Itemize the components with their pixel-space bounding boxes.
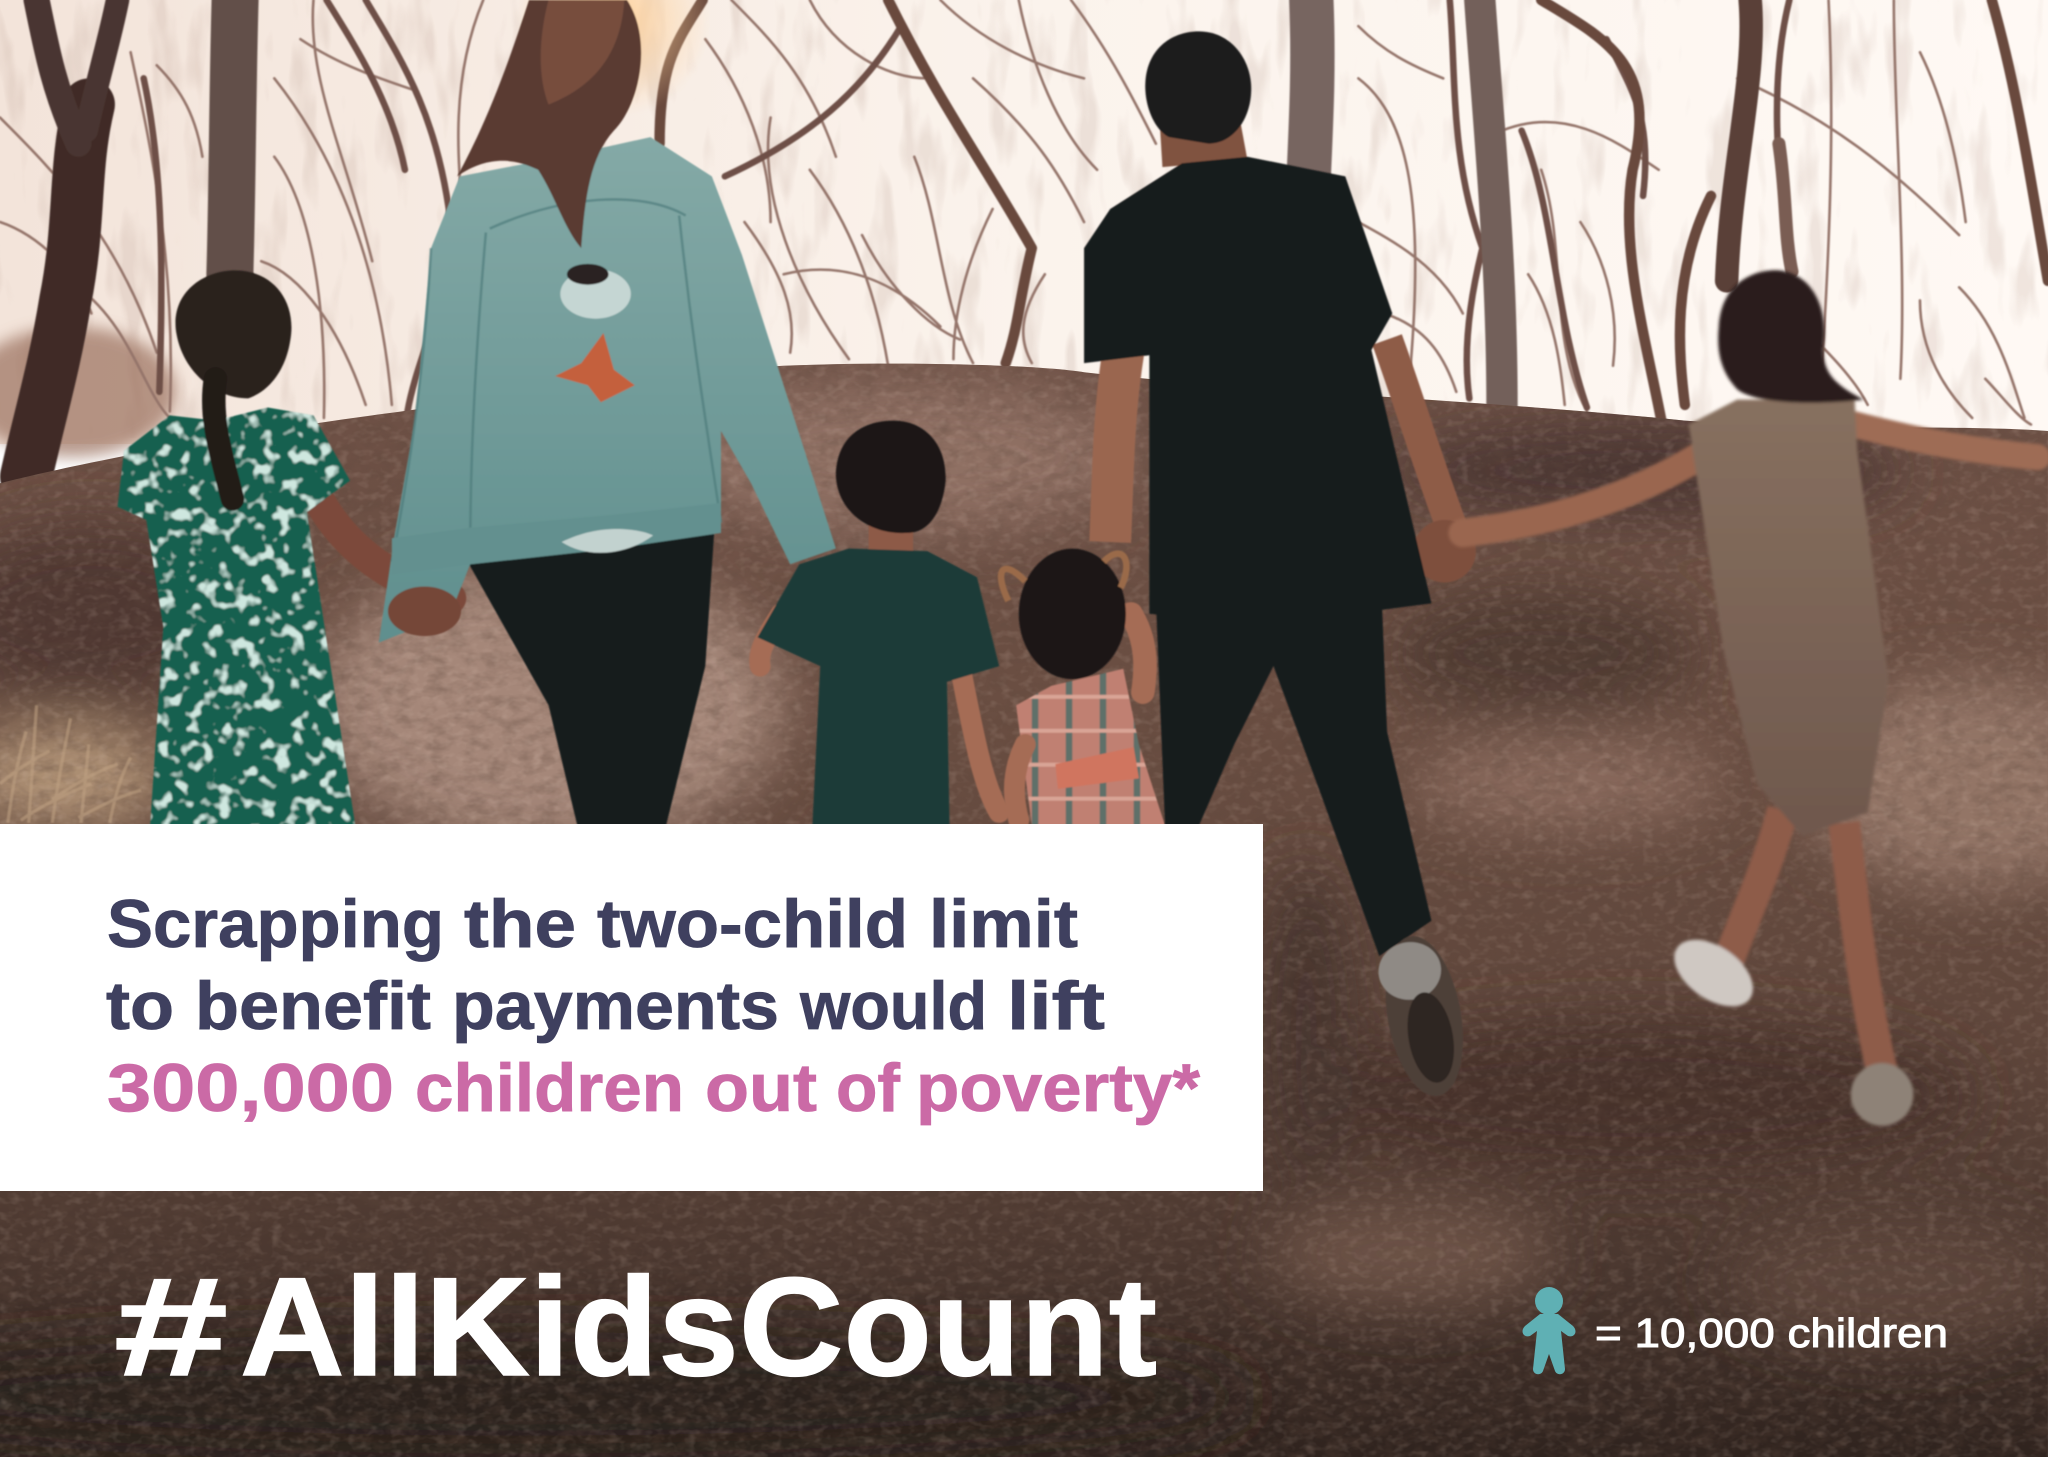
neck [869, 516, 913, 552]
hem tear [562, 529, 653, 553]
headline line 3 highlight: poverty* [916, 1050, 1201, 1126]
icon: child figure [1523, 1287, 1575, 1374]
pigtails [1001, 554, 1126, 601]
legend label: = 10,000 children [1595, 1310, 1948, 1356]
dress [1016, 669, 1165, 825]
panel background [0, 824, 1263, 1191]
head [836, 421, 946, 533]
legs [1156, 601, 1431, 956]
jacket [379, 137, 836, 643]
hashtag: AllKidsCount [240, 1248, 1157, 1405]
sash [1055, 747, 1139, 789]
hair highlight [541, 0, 624, 104]
hem band [392, 503, 721, 575]
person: boy in dark shirt [758, 421, 999, 825]
headline line 1: the [464, 886, 576, 962]
fine twig texture [0, 0, 2048, 438]
sky [0, 0, 2048, 444]
headline line 3 highlight: 300,000 [107, 1050, 394, 1126]
dress [1689, 400, 1889, 836]
right arm [1855, 424, 2038, 457]
dry grass [0, 705, 141, 823]
headline line 2: to [106, 968, 174, 1044]
person: father in black t-shirt [1084, 31, 1476, 1102]
arms [760, 614, 999, 812]
raised arm [1131, 614, 1145, 692]
headline line 3 highlight: out [705, 1050, 817, 1126]
arm [313, 490, 451, 598]
headline line 2: payments [452, 968, 779, 1044]
shoes [1662, 926, 1765, 1020]
leaf litter texture [0, 353, 2048, 1457]
headline line 2: would [799, 968, 987, 1044]
headline [106, 886, 1201, 1126]
hair [175, 270, 291, 398]
legs [1724, 810, 1885, 1081]
left arm [1463, 457, 1698, 533]
jeans [468, 529, 714, 825]
headline line 1: two-child [597, 886, 908, 962]
person: mother in denim jacket [379, 0, 836, 825]
hashtag: # [114, 1248, 228, 1405]
shoe [1373, 930, 1474, 1102]
headline line 2: lift [1007, 968, 1105, 1044]
jacket seams [392, 199, 721, 562]
ground texture [0, 353, 2048, 1457]
headline line 3 highlight: children [415, 1050, 684, 1126]
hair [1718, 270, 1864, 403]
bare trees and branches [0, 0, 2048, 477]
headline line 3 highlight: of [836, 1050, 900, 1126]
neck [1160, 124, 1247, 167]
glow around head [516, 0, 712, 118]
hand in hand [388, 586, 461, 636]
hands [1413, 520, 1476, 583]
head [1145, 31, 1251, 144]
headline line 2: benefit [195, 968, 431, 1044]
reddish shrubs low left [0, 327, 176, 457]
arm [1014, 744, 1025, 820]
person: toddler in plaid dress [1001, 549, 1165, 825]
legend [1523, 1287, 1948, 1374]
hair [1019, 549, 1126, 679]
dress [118, 408, 355, 825]
t-shirt [1084, 157, 1431, 627]
white text panel [0, 824, 1263, 1191]
shirt [758, 549, 999, 825]
person: girl in green dress [118, 270, 451, 825]
headline line 1: Scrapping [107, 886, 444, 962]
person: running girl in taupe dress [1463, 270, 2038, 1126]
ground light and shadow patches [0, 353, 2048, 1457]
right arm [1387, 340, 1452, 529]
hair [457, 0, 641, 248]
ground [0, 364, 2048, 1457]
braid [214, 379, 232, 499]
jacket tear and bird patch [560, 269, 631, 319]
left arm [1110, 353, 1123, 542]
headline line 1: limit [929, 886, 1078, 962]
